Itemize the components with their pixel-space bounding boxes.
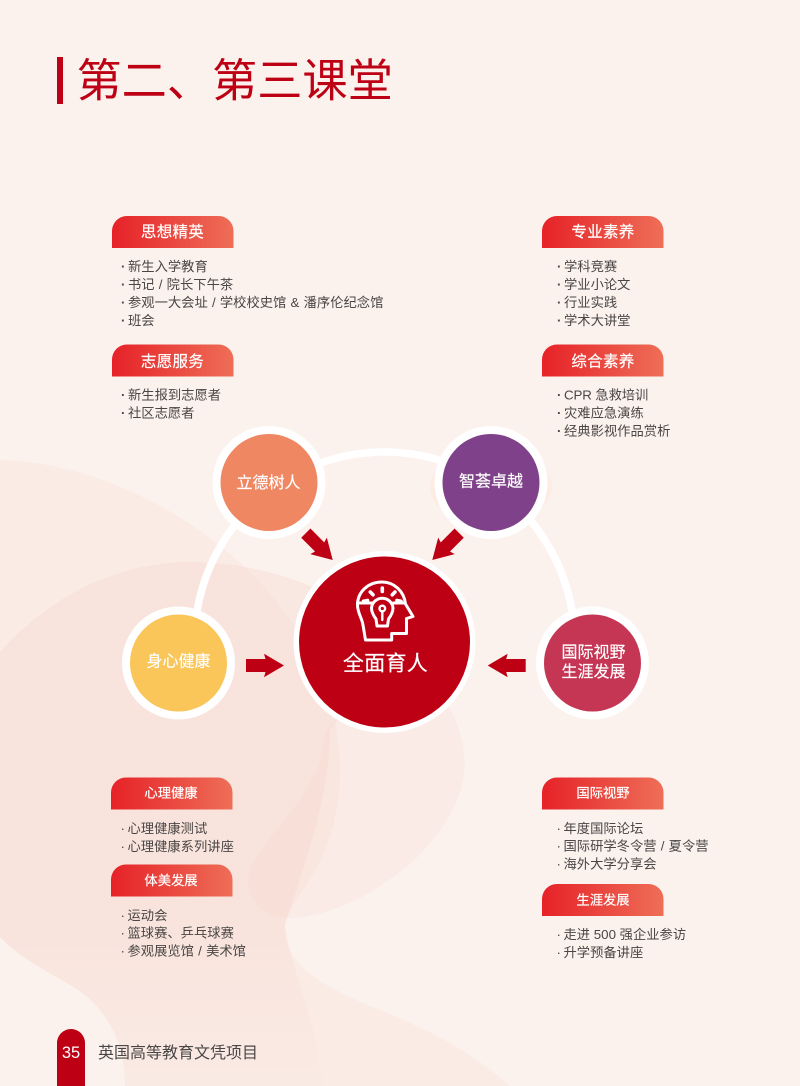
node: 身心健康: 身心健康	[146, 652, 211, 670]
list: 思想精英: ·	[121, 295, 125, 310]
list: 心理健康: ·	[120, 821, 125, 836]
tag: 心理健康: 心理健康	[144, 784, 198, 800]
node: 国际视野 生涯发展	[536, 606, 649, 720]
list: 专业素养: ·	[557, 295, 561, 310]
list: 国际视野: 国际研学冬令营 / 夏令营	[564, 838, 709, 854]
node: 立德树人	[212, 426, 326, 539]
list: 专业素养: ·	[557, 259, 561, 274]
list: 综合素养: ·	[557, 424, 561, 438]
node: 智荟卓越	[434, 426, 548, 539]
list: 心理健康: 心理健康系列讲座	[128, 838, 234, 854]
list: 志愿服务: ·	[121, 388, 125, 402]
central node: 全面育人: 全面育人	[343, 652, 428, 676]
panel: 志愿服务	[112, 344, 234, 420]
tag: 思想精英: 思想精英	[141, 223, 204, 241]
tag: 专业素养: 专业素养	[571, 223, 635, 241]
panel: 生涯发展	[542, 884, 686, 960]
list: 体美发展: ·	[120, 944, 125, 958]
panel: 专业素养	[542, 216, 664, 328]
list: 国际视野: ·	[556, 856, 561, 872]
node: 国际视野 生涯发展: 国际视野	[561, 644, 626, 662]
node: 身心健康	[122, 606, 235, 720]
list: 国际视野: 年度国际论坛	[564, 821, 643, 836]
tag: 综合素养: 综合素养	[571, 352, 635, 370]
list: 体美发展: ·	[120, 926, 125, 940]
page number tab: 35	[62, 1044, 80, 1062]
list: 生涯发展: ·	[556, 945, 561, 960]
list: 思想精英: 书记 / 院长下午茶	[128, 277, 233, 292]
list: 体美发展: 运动会	[128, 908, 167, 923]
footer text: 英国高等教育文凭项目	[98, 1044, 258, 1062]
tag: 志愿服务: 志愿服务	[141, 352, 204, 370]
background: soft wave shapes	[0, 449, 552, 1086]
list: 专业素养: ·	[557, 277, 561, 292]
panel: 国际视野	[542, 778, 709, 872]
list: 综合素养: 灾难应急演练	[564, 404, 644, 420]
list: 综合素养: ·	[557, 406, 561, 420]
panel: 思想精英	[112, 216, 383, 328]
list: 志愿服务: 社区志愿者	[128, 406, 194, 420]
arrow: 国际视野 to centre	[488, 654, 526, 677]
panel: 心理健康	[111, 778, 234, 854]
tag: 生涯发展: 生涯发展	[576, 892, 630, 908]
node: 智荟卓越: 智荟卓越	[459, 472, 523, 490]
list: 思想精英: ·	[121, 259, 125, 274]
list: 生涯发展: ·	[556, 927, 561, 942]
list: 志愿服务: 新生报到志愿者	[128, 388, 221, 402]
node: 立德树人: 立德树人	[236, 474, 301, 492]
central node: 全面育人	[294, 551, 476, 733]
list: 专业素养: 学术大讲堂	[564, 313, 630, 328]
list: 专业素养: 学科竞赛	[564, 258, 617, 274]
list: 综合素养: 经典影视作品赏析	[564, 424, 670, 438]
connecting arc	[197, 452, 572, 611]
arrow: 立德树人 to centre	[298, 525, 341, 568]
tag: 国际视野: 国际视野	[576, 786, 630, 800]
panel: 综合素养	[542, 344, 670, 438]
node: 国际视野 生涯发展: 生涯发展	[561, 663, 626, 681]
list: 国际视野: ·	[556, 838, 561, 854]
list: 思想精英: ·	[121, 313, 125, 328]
list: 专业素养: 学业小论文	[564, 277, 630, 292]
list: 综合素养: ·	[557, 388, 561, 402]
list: 志愿服务: ·	[121, 406, 125, 420]
list: 专业素养: ·	[557, 313, 561, 328]
list: 思想精英: 班会	[128, 313, 155, 328]
list: 体美发展: 参观展览馆 / 美术馆	[128, 942, 246, 958]
panel: 体美发展	[111, 864, 246, 958]
icon: head with light bulb	[358, 582, 413, 640]
list: 思想精英: ·	[121, 277, 125, 292]
list: 生涯发展: 走进 500 强企业参访	[564, 926, 686, 942]
list: 体美发展: 篮球赛、乒乓球赛	[128, 926, 234, 940]
tag: 思想精英	[112, 216, 234, 248]
title: 第二、第三课堂	[76, 56, 393, 106]
tag: 生涯发展	[542, 884, 664, 916]
list: 生涯发展: 升学预备讲座	[564, 944, 643, 960]
list: 思想精英: 新生入学教育	[128, 259, 208, 274]
list: 思想精英: 参观一大会址 / 学校校史馆 & 潘序伦纪念馆	[128, 294, 383, 310]
list: 专业素养: 行业实践	[564, 295, 617, 310]
tag: 体美发展: 体美发展	[144, 873, 198, 888]
page number tab	[57, 1029, 85, 1086]
list: 国际视野: 海外大学分享会	[564, 856, 657, 872]
list: 体美发展: ·	[120, 908, 125, 923]
list: 心理健康: ·	[120, 839, 125, 854]
list: 国际视野: ·	[556, 821, 561, 836]
list: 综合素养: CPR 急救培训	[564, 388, 648, 402]
arrow: 身心健康 to centre	[246, 654, 284, 677]
arrow: 智荟卓越 to centre	[424, 525, 467, 568]
list: 心理健康: 心理健康测试	[128, 820, 207, 836]
tag: 国际视野	[542, 778, 664, 810]
